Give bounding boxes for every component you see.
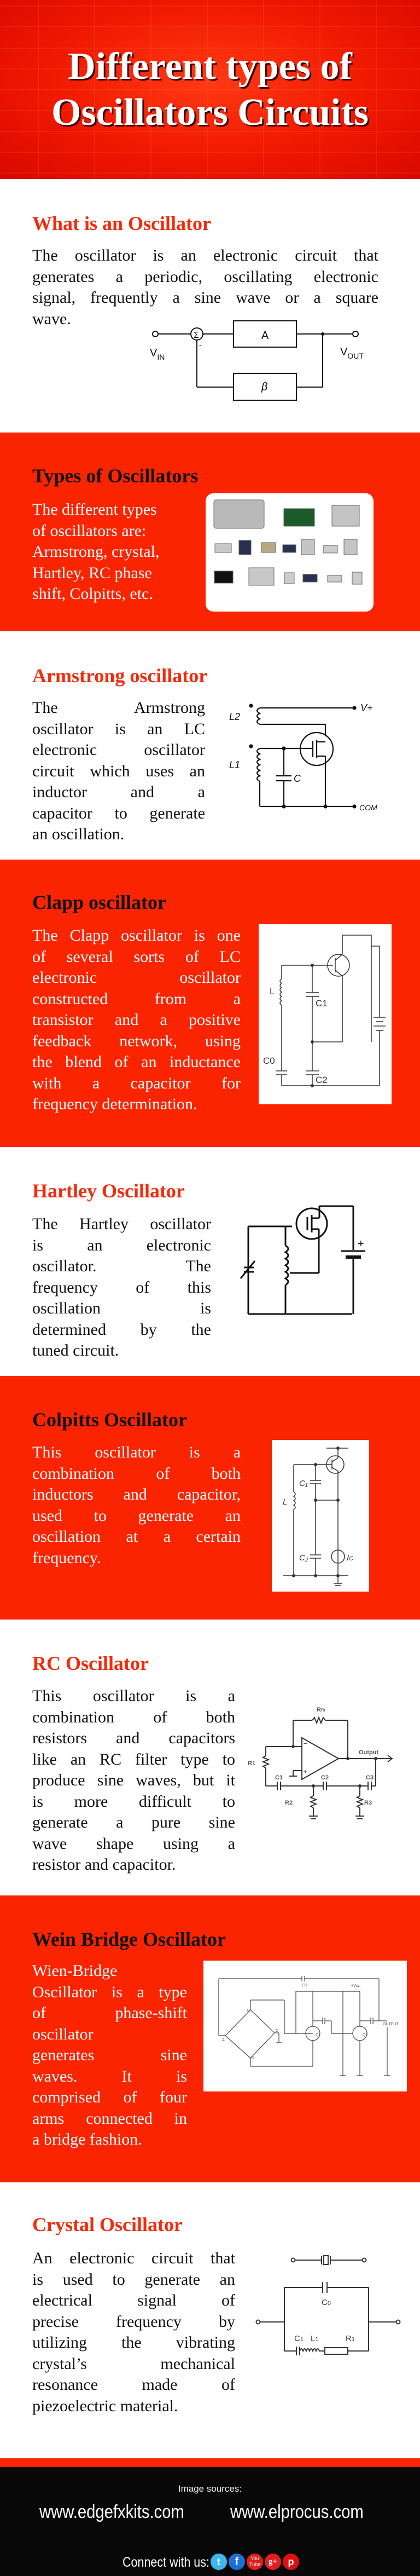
heading: RC Oscillator [32, 1652, 149, 1674]
text block [32, 1687, 235, 1874]
heading: Wein Bridge Oscillator [32, 1928, 226, 1950]
icon: pinterest [283, 2554, 299, 2570]
section: hartley [32, 1180, 365, 1359]
diagram: clapp circuit: C2 [316, 1075, 328, 1085]
diagram: armstrong circuit: L1 [229, 759, 240, 770]
text block: used to generate an [32, 1507, 241, 1524]
text block: Armstrong, crystal, [32, 543, 159, 561]
footer [0, 2458, 420, 2576]
section: what is an oscillator [32, 212, 378, 401]
text block: produce sine waves, but it [32, 1771, 235, 1789]
section: crystal [32, 2214, 400, 2414]
diagram: feedback loop: β [261, 381, 267, 393]
diagram: wien bridge circuit: D [252, 2056, 254, 2060]
text block: oscillation is [32, 1299, 211, 1317]
text block: crystal’s mechanical [32, 2354, 235, 2373]
source url 1: www.edgefxkits.com [39, 2502, 184, 2522]
diagram: crystal equivalent circuit: R1 [346, 2334, 355, 2343]
heading: Hartley Oscillator [32, 1180, 185, 1202]
diagram: feedback loop: V [150, 347, 157, 359]
text block: precise frequency by [32, 2313, 235, 2330]
diagram: crystal equivalent circuit: L1 [311, 2334, 318, 2343]
text block [32, 1215, 211, 1359]
diagram: colpitts circuit: IC [347, 1553, 353, 1563]
header banner [0, 0, 420, 179]
diagram: wien bridge circuit: B [247, 2009, 250, 2013]
diagram: wien bridge circuit: C [276, 2029, 278, 2033]
diagram: RC phase shift circuit: Output [359, 1749, 378, 1756]
text block: a bridge fashion. [32, 2130, 142, 2148]
text block: utilizing the vibrating [32, 2333, 235, 2352]
diagram: colpitts circuit: C₁ [299, 1479, 308, 1488]
diagram: RC phase shift circuit: C1 [275, 1774, 283, 1781]
panel: clapp oscillator [0, 860, 420, 1147]
text block: like an RC filter type to [32, 1750, 235, 1768]
heading: What is an Oscillator [32, 212, 211, 234]
diagram: crystal equivalent circuit: C0 [322, 2298, 331, 2307]
diagram: crystal equivalent circuit [256, 2255, 400, 2355]
title [51, 45, 370, 134]
text block: electronic oscillator [32, 969, 241, 987]
text block: the blend of an inductance [32, 1053, 241, 1071]
text block [32, 2249, 235, 2414]
text block: resistors and capacitors [32, 1729, 235, 1747]
text block: The Armstrong [32, 699, 205, 717]
text block [32, 500, 159, 603]
text block: generates sine [32, 2046, 187, 2064]
diagram: feedback loop: IN [157, 353, 165, 361]
diagram: clapp circuit: C0 [263, 1056, 275, 1066]
panel: wein bridge [0, 1895, 420, 2182]
title: Oscillators Circuits [51, 91, 369, 134]
icon: youtube: Tube [249, 2562, 260, 2567]
panel: types of oscillators [0, 433, 420, 631]
text block: of oscillators are: [32, 521, 146, 540]
text block: piezoelectric material. [32, 2397, 178, 2414]
text block: determined by the [32, 1321, 211, 1338]
text block: The different types [32, 500, 157, 518]
text block: comprised of four [32, 2088, 187, 2106]
icon: twitter [211, 2554, 227, 2570]
diagram: armstrong circuit: C [294, 773, 301, 784]
text block: an oscillation. [32, 825, 124, 843]
heading: Types of Oscillators [32, 465, 198, 487]
text block [32, 1443, 241, 1567]
diagram: wien bridge circuit: Q2 [363, 2033, 368, 2037]
diagram: hartley circuit: + [358, 1238, 364, 1250]
text block: electronic oscillator [32, 741, 205, 759]
text block: combination of both [32, 1708, 235, 1726]
text block: wave. [32, 310, 71, 327]
diagram: RC phase shift circuit: Rfb [317, 1707, 325, 1713]
icon: youtube [247, 2554, 263, 2570]
text block: is more difficult to [32, 1793, 235, 1810]
heading: Crystal Oscillator [32, 2214, 183, 2235]
diagram: RC phase shift circuit: R1 [248, 1760, 255, 1767]
diagram: colpitts circuit: L [283, 1497, 287, 1507]
diagram: RC phase shift circuit: C3 [366, 1774, 374, 1781]
diagram: armstrong circuit: COM [359, 803, 377, 812]
connect with us: Connect with us: [122, 2555, 209, 2570]
icon: google plus: g+ [269, 2557, 277, 2566]
text block: oscillator is an LC [32, 719, 205, 738]
text block: generates a periodic, oscillating electronic [32, 267, 378, 286]
text block: tuned circuit. [32, 1341, 119, 1359]
diagram: feedback loop: V [340, 346, 347, 358]
text block [32, 246, 378, 327]
text block [32, 926, 241, 1113]
text block: arms connected in [32, 2109, 187, 2128]
text block: oscillator [32, 2025, 94, 2043]
text block: circuit which uses an [32, 762, 205, 780]
image: oscillator components [206, 493, 374, 612]
diagram: wien bridge circuit: Q1 [316, 2033, 320, 2037]
diagram: RC phase shift circuit: + [304, 1769, 307, 1776]
diagram: colpitts circuit [272, 1440, 369, 1592]
text block: transistor and a positive [32, 1011, 241, 1029]
text block: The oscillator is an electronic circuit that [32, 246, 378, 264]
icon: youtube: You [250, 2556, 259, 2561]
text block [32, 1962, 187, 2148]
text block: resonance made of [32, 2376, 235, 2394]
diagram: wien bridge circuit: +Vcc [351, 1984, 360, 1988]
title: Different types of [68, 45, 352, 88]
diagram: armstrong circuit: V+ [360, 702, 373, 713]
icon: facebook: f [235, 2556, 238, 2568]
diagram: hartley circuit [240, 1206, 365, 1315]
image sources label: Image sources: [178, 2483, 242, 2494]
text block: frequency of this [32, 1278, 211, 1296]
text block: feedback network, using [32, 1031, 241, 1050]
text block: inductor and a [32, 783, 205, 801]
heading: Colpitts Oscillator [32, 1409, 187, 1431]
diagram: clapp circuit: L [270, 986, 275, 996]
diagram: feedback loop: Σ [194, 331, 199, 340]
text block: waves. It is [32, 2067, 187, 2085]
text block: The Hartley oscillator [32, 1215, 211, 1233]
text block: The Clapp oscillator is one [32, 926, 241, 944]
diagram: RC phase shift circuit [248, 1707, 393, 1819]
diagram: RC phase shift circuit: C2 [321, 1774, 329, 1781]
text block: generate a pure sine [32, 1813, 235, 1831]
heading: Clapp oscillator [32, 891, 166, 913]
section: armstrong [32, 665, 377, 843]
icon: twitter: t [217, 2556, 220, 2567]
diagram: feedback loop: OUT [347, 351, 364, 360]
text block: shift, Colpitts, etc. [32, 585, 153, 603]
icon: facebook [229, 2554, 245, 2570]
text block: is used to generate an [32, 2270, 235, 2289]
text block: inductors and capacitor, [32, 1485, 241, 1503]
text block: combination of both [32, 1464, 241, 1483]
text block: An electronic circuit that [32, 2249, 235, 2267]
text block: of several sorts of LC [32, 947, 241, 966]
text block: oscillator. The [32, 1257, 211, 1275]
diagram: feedback loop: A [261, 330, 269, 342]
text block [32, 699, 205, 843]
diagram: colpitts circuit: C₂ [299, 1553, 308, 1563]
text block: is an electronic [32, 1236, 211, 1254]
heading: Armstrong oscillator [32, 665, 207, 687]
text block: frequency. [32, 1548, 101, 1567]
diagram: wien bridge circuit: OUTPUT [383, 2022, 399, 2026]
text block: signal, frequently a sine wave or a square [32, 289, 378, 307]
connect with us [122, 2554, 299, 2570]
diagram: feedback loop [150, 320, 364, 401]
icon: pinterest: p [288, 2556, 294, 2567]
text block: electrical signal of [32, 2291, 235, 2309]
diagram: wien bridge circuit [203, 1961, 407, 2091]
diagram: armstrong circuit [229, 702, 377, 812]
text block: of phase-shift [32, 2004, 187, 2022]
text block: Hartley, RC phase [32, 564, 152, 581]
diagram: feedback loop: - [199, 341, 202, 349]
diagram: wien bridge circuit: C3 [302, 1984, 307, 1987]
text block: oscillation at a certain [32, 1528, 241, 1546]
diagram: armstrong circuit: L2 [229, 711, 240, 722]
text block: Oscillator is a type [32, 1983, 187, 2001]
text block: Wien-Bridge [32, 1962, 117, 1980]
icon: google plus [265, 2554, 281, 2570]
diagram: wien bridge circuit: A [222, 2038, 225, 2042]
diagram: RC phase shift circuit: R2 [285, 1800, 293, 1806]
text block: with a capacitor for [32, 1074, 241, 1092]
diagram: clapp circuit: C1 [316, 998, 328, 1008]
section: RC oscillator [32, 1652, 393, 1874]
diagram: crystal equivalent circuit: C1 [294, 2334, 304, 2343]
text block: constructed from a [32, 990, 241, 1007]
panel: colpitts [0, 1376, 420, 1620]
diagram: RC phase shift circuit: − [304, 1741, 307, 1747]
diagram: RC phase shift circuit: R3 [364, 1800, 372, 1806]
text block: capacitor to generate [32, 804, 205, 822]
text block: frequency determination. [32, 1095, 197, 1113]
text block: This oscillator is a [32, 1687, 235, 1705]
text block: wave shape using a [32, 1834, 235, 1853]
source url 2: www.elprocus.com [230, 2502, 364, 2522]
text block: This oscillator is a [32, 1443, 241, 1461]
diagram: clapp circuit [259, 924, 392, 1104]
text block: resistor and capacitor. [32, 1855, 176, 1874]
